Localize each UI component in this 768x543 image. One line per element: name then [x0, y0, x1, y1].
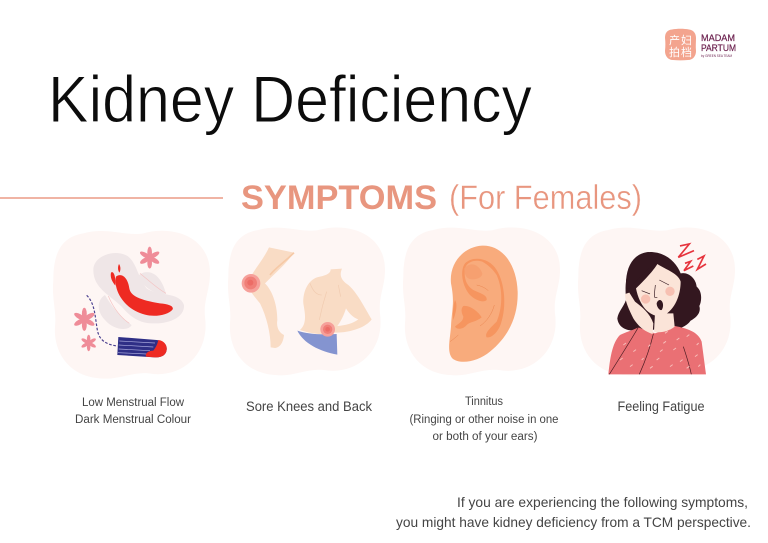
caption: fatigue: Feeling Fatigue: [618, 399, 704, 414]
logo: Madam Partum: 产: [669, 33, 680, 47]
panel: ear illustration: [403, 227, 560, 375]
shirt: [608, 326, 706, 374]
caption: knees and back: Sore Knees and Back: [246, 399, 372, 414]
neck: [654, 313, 675, 332]
caption: menstrual symptoms: Low Menstrual Flow: [82, 397, 185, 409]
blush: [665, 287, 675, 296]
logo: Madam Partum: [665, 29, 736, 60]
icon: ear: [449, 246, 518, 362]
icon: blue wrap: [297, 331, 337, 355]
face: [636, 264, 681, 316]
icon: back pain marker: [320, 322, 335, 337]
closed eyes and nose: [642, 280, 669, 297]
caption: tinnitus: or both of your ears): [432, 431, 538, 443]
logo: Madam Partum: PARTUM: [701, 43, 736, 53]
caption: menstrual symptoms: Dark Menstrual Colour: [75, 414, 191, 426]
hair fringe: [626, 252, 657, 288]
hair back: [617, 252, 701, 330]
yawning mouth: [657, 300, 663, 310]
logo: Madam Partum: MADAM: [701, 33, 735, 43]
arm and shirt lines: [609, 327, 691, 374]
footer note: If you are experiencing the following symptoms,: [457, 494, 748, 510]
caption: tinnitus: (Ringing or other noise in one: [410, 414, 558, 426]
logo: Madam Partum: 档: [681, 45, 692, 59]
caption: menstrual symptoms: [75, 397, 191, 426]
shirt speckles: [620, 331, 700, 368]
logo: Madam Partum: by GREEN SEA TEAM: [701, 54, 732, 58]
icon: torso: [300, 269, 372, 334]
caption: tinnitus: [410, 396, 558, 443]
icon: leg: [248, 247, 294, 348]
heading: symptoms: SYMPTOMS: [241, 179, 437, 217]
logo: Madam Partum: 拍: [669, 45, 680, 59]
heading: symptoms: [0, 179, 642, 217]
icon: sanitary pad: [93, 253, 184, 329]
icon: sleeping woman: [608, 252, 706, 374]
icon: zzz: [678, 244, 706, 271]
caption: tinnitus: Tinnitus: [465, 396, 503, 408]
footer note: you might have kidney deficiency from a TCM perspective.: [396, 514, 751, 530]
panel: fatigue illustration: [578, 227, 735, 375]
icon: tampon: [87, 295, 167, 357]
heading: symptoms: (For Females): [449, 179, 642, 217]
footer note: [396, 494, 751, 530]
hand: [625, 293, 653, 334]
panel: knees and back illustration: [228, 227, 385, 375]
icon: flowers: [73, 247, 160, 351]
icon: knee pain marker: [242, 274, 260, 293]
panel: menstrual illustration: [53, 231, 210, 379]
title: Kidney Deficiency: [48, 62, 532, 136]
logo: Madam Partum: 妇: [681, 34, 692, 47]
